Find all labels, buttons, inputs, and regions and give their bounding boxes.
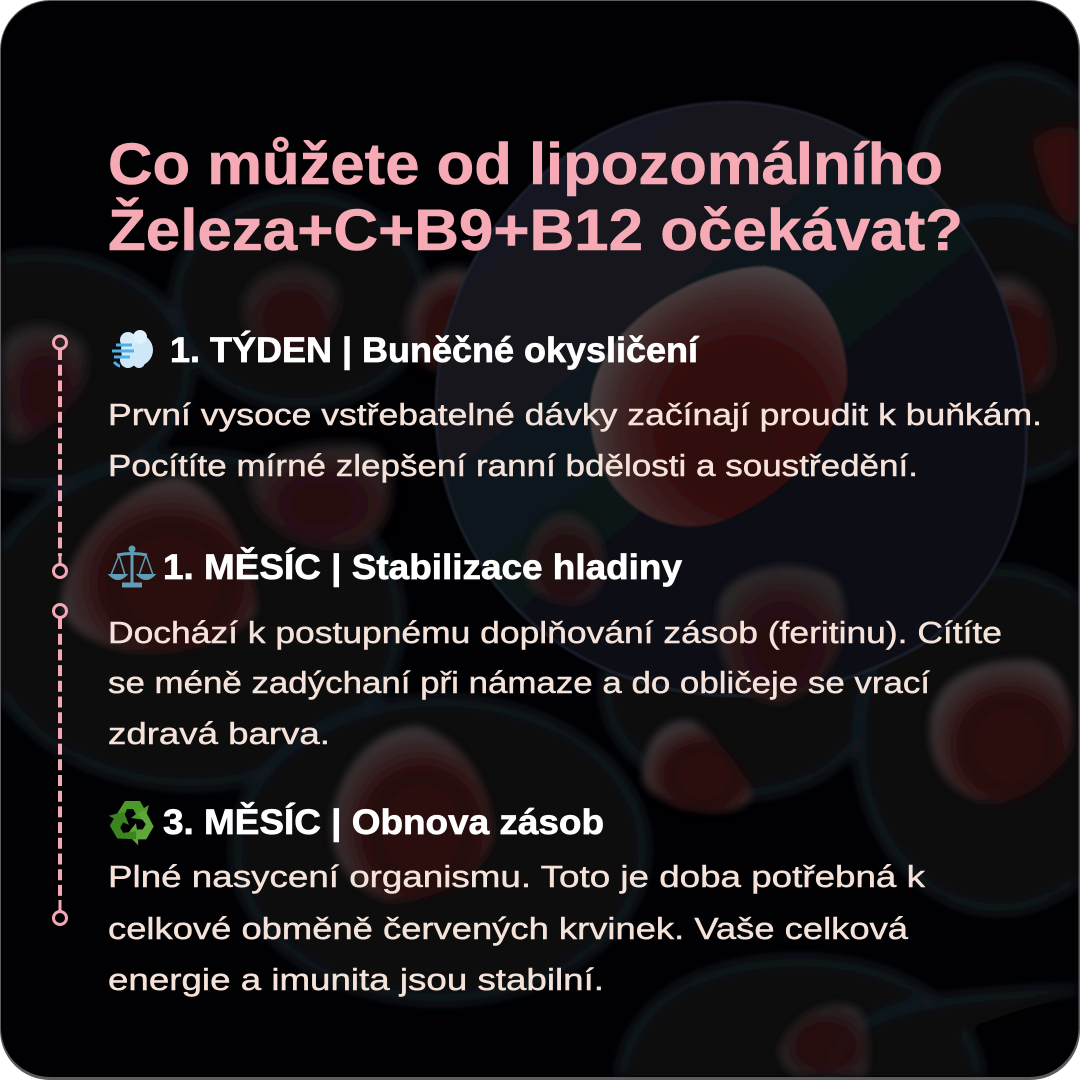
- heading: first week: 1. TÝDEN | Buněčné okysličení: [170, 330, 699, 370]
- section: third month: [105, 801, 926, 997]
- heading: first month: 1. MĚSÍC | Stabilizace hladiny: [163, 547, 683, 587]
- text: first month description: Dochází k postupnému doplňování zásob (feritinu). Cítíte: [108, 615, 1002, 650]
- icon: balance scale: [110, 546, 154, 585]
- timeline connector: first month: [54, 604, 66, 924]
- icon: dash of air cloud: [112, 330, 153, 368]
- text: third month description: celkové obměně červených krvinek. Vaše celková: [108, 911, 909, 946]
- text: first week description: První vysoce vstřebatelné dávky začínají proudit k buňkám.: [108, 397, 1042, 432]
- big foreground cell: [436, 102, 1027, 696]
- text: third month description: [108, 859, 926, 997]
- section: first week: [108, 330, 1042, 483]
- text: first week description: Pocítíte mírné zlepšení ranní bdělosti a soustředění.: [108, 448, 918, 483]
- text: third month description: Plné nasycení organismu. Toto je doba potřebná k: [108, 859, 926, 894]
- section: first month: [108, 546, 1002, 751]
- text: first month description: [108, 615, 1002, 751]
- text: first month description: zdravá barva.: [108, 716, 330, 751]
- title: Železa+C+B9+B12 očekávat?: [108, 198, 963, 263]
- title: [108, 132, 963, 263]
- text: first week description: [108, 397, 1042, 483]
- title: Co můžete od lipozomálního: [108, 132, 943, 197]
- heading: third month: 3. MĚSÍC | Obnova zásob: [163, 802, 604, 842]
- timeline connector: first week: [54, 336, 66, 578]
- icon: recycling symbol: [108, 801, 154, 846]
- text: third month description: energie a imunita jsou stabilní.: [108, 962, 604, 997]
- text: first month description: se méně zadýchaní při námaze a do obličeje se vrací: [108, 665, 930, 700]
- central red nucleus: [590, 266, 847, 527]
